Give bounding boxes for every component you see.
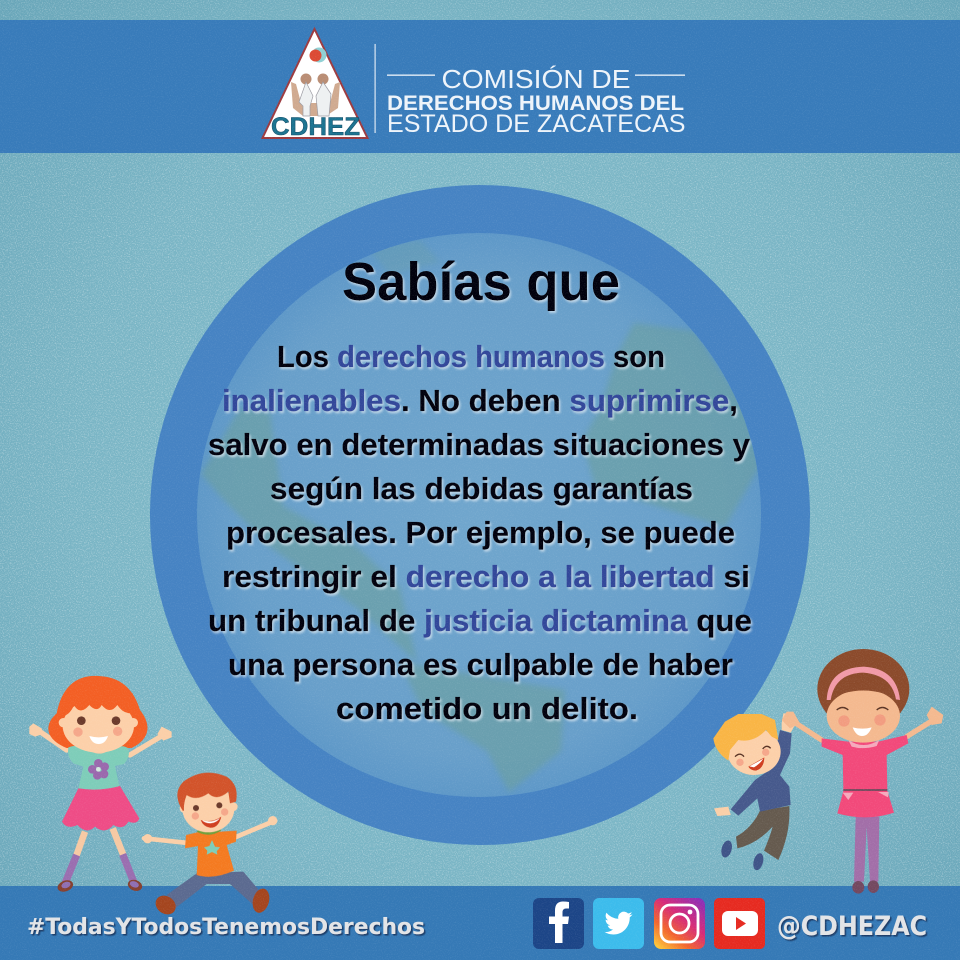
body text (208, 339, 752, 726)
name rule left (387, 74, 435, 76)
icon: facebook (533, 898, 584, 949)
logo divider (374, 44, 376, 133)
icon: twitter (593, 898, 644, 949)
illustration: red-haired girl (29, 676, 172, 894)
name line three: ESTADO DE ZACATECAS (387, 110, 686, 138)
line 7: un tribunal de justicia dictamina que (208, 603, 752, 638)
globe circle (150, 185, 810, 845)
line 6: restringir el derecho a la libertad si (222, 559, 750, 594)
line 3: salvo en determinadas situaciones y (208, 427, 751, 462)
social handle: @CDHEZAC (777, 911, 927, 942)
icon: youtube (714, 898, 765, 949)
illustration: blond boy (713, 713, 795, 871)
heading: Sabías que (342, 252, 620, 312)
line 4: según las debidas garantías (270, 471, 693, 506)
logo hands and figures (291, 74, 340, 116)
logo acronym: CDHEZ (271, 113, 360, 141)
logo globe mark (310, 48, 326, 62)
line 2: inalienables. No deben suprimirse, (222, 383, 738, 418)
illustration: girl with headband (782, 649, 943, 894)
name line one: COMISIÓN DE (442, 65, 630, 94)
icon: instagram (654, 898, 705, 949)
logo (262, 29, 368, 141)
outer ring (150, 185, 810, 845)
name rule right (635, 74, 685, 76)
organisation name (387, 65, 686, 138)
footer band (0, 886, 960, 960)
header band (0, 20, 960, 153)
globe landmasses (201, 240, 760, 792)
hashtag: #TodasYTodosTenemosDerechos (27, 915, 425, 940)
line 9: cometido un delito. (336, 691, 638, 726)
logo triangle (262, 29, 368, 138)
line 8: una persona es culpable de haber (228, 647, 733, 682)
line 1: Los derechos humanos son (277, 339, 665, 374)
inner globe (197, 233, 761, 797)
line 5: procesales. Por ejemplo, se puede (226, 515, 735, 550)
illustration: red-haired boy (143, 773, 277, 918)
name line two: DERECHOS HUMANOS DEL (387, 92, 684, 115)
